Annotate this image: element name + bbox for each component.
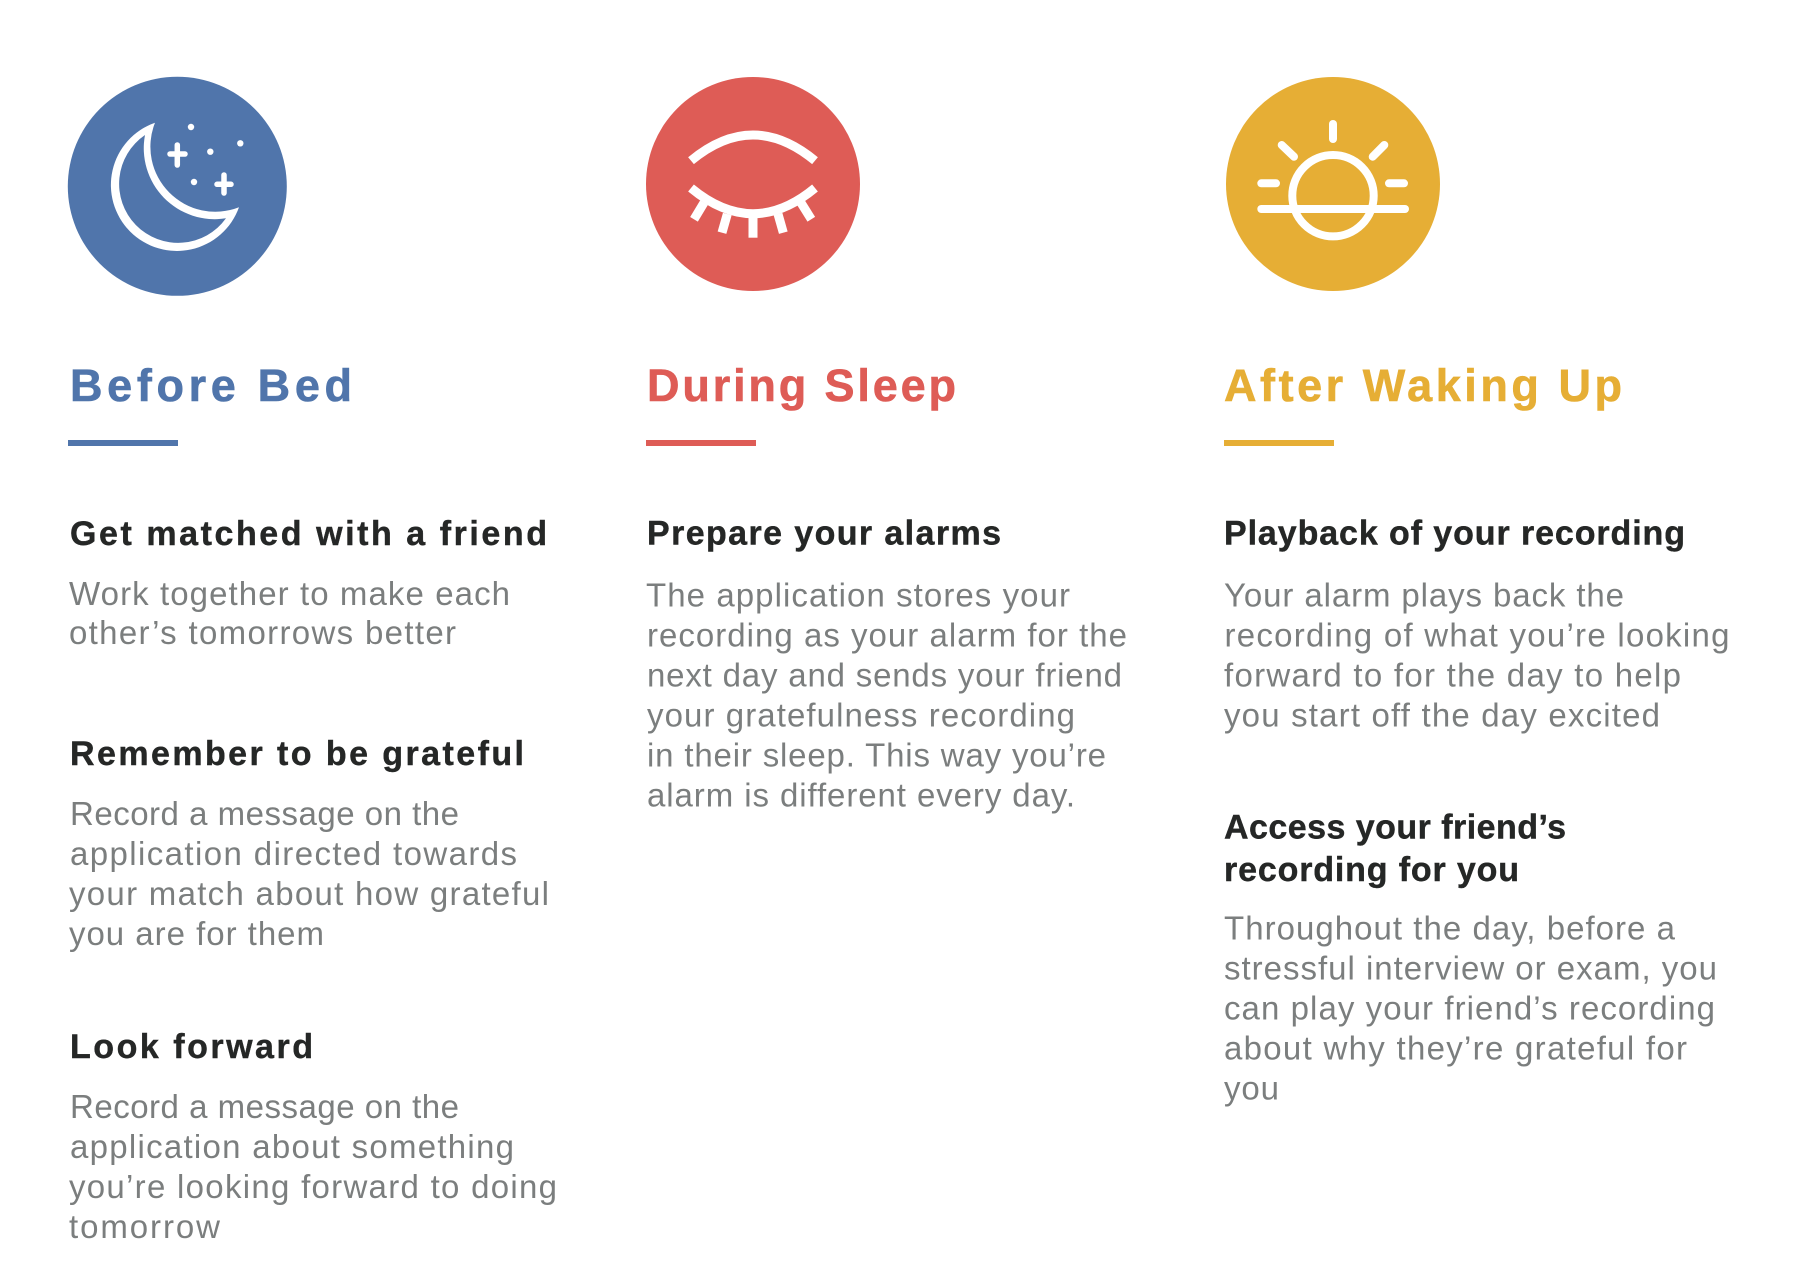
item: prepare your alarms: next day and sends your friend <box>647 657 1122 694</box>
item: look forward <box>69 1028 557 1245</box>
item: get matched with a friend: other’s tomorrows better <box>69 614 456 651</box>
panel: before bed <box>68 77 557 1245</box>
icon: crescent moon and stars <box>68 77 287 296</box>
item: access your friend's recording for you: recording for you <box>1224 851 1519 889</box>
item: prepare your alarms: recording as your alarm for the <box>647 617 1127 654</box>
item: prepare your alarms <box>646 514 1127 814</box>
item: playback of your recording <box>1224 514 1730 734</box>
icon: sun on the horizon <box>1226 77 1440 291</box>
item: look forward: application about something <box>70 1128 514 1165</box>
item: look forward: Look forward <box>70 1028 313 1066</box>
panel: after waking up <box>1224 77 1730 1106</box>
item: prepare your alarms: in their sleep. This way you’re <box>647 737 1106 774</box>
item: playback of your recording: you start off the day excited <box>1224 697 1660 734</box>
heading: during sleep: During Sleep <box>647 360 956 411</box>
item: get matched with a friend: Get matched with a friend <box>70 515 547 553</box>
item: remember to be grateful: you are for them <box>69 915 324 952</box>
item: remember to be grateful: Remember to be grateful <box>70 735 524 773</box>
item: remember to be grateful: application directed towards <box>70 835 517 872</box>
item: access your friend's recording for you <box>1224 809 1717 1106</box>
item: prepare your alarms: your gratefulness recording <box>647 697 1075 734</box>
item: playback of your recording: Your alarm plays back the <box>1224 577 1624 614</box>
item: prepare your alarms: alarm is different every day. <box>647 777 1075 814</box>
item: look forward: you’re looking forward to doing <box>69 1168 557 1205</box>
item: playback of your recording: Playback of your recording <box>1224 514 1685 552</box>
item: access your friend's recording for you: can play your friend’s recording <box>1224 989 1715 1026</box>
item: prepare your alarms: Prepare your alarms <box>647 514 1001 552</box>
item: playback of your recording: recording of what you’re looking <box>1224 617 1730 654</box>
item: look forward: Record a message on the <box>70 1088 459 1125</box>
item: remember to be grateful: your match about how grateful <box>69 875 549 912</box>
item: access your friend's recording for you: Throughout the day, before a <box>1224 909 1676 946</box>
item: remember to be grateful <box>69 735 549 952</box>
heading: before bed: Before Bed <box>70 360 352 411</box>
item: get matched with a friend <box>69 515 547 651</box>
item: access your friend's recording for you: stressful interview or exam, you <box>1224 949 1717 986</box>
item: playback of your recording: forward to for the day to help <box>1224 657 1681 694</box>
item: access your friend's recording for you: Access your friend’s <box>1224 809 1566 847</box>
heading: after waking up: After Waking Up <box>1224 360 1622 411</box>
item: look forward: tomorrow <box>69 1208 220 1245</box>
panel: during sleep <box>646 77 1127 814</box>
item: access your friend's recording for you: you <box>1224 1069 1279 1106</box>
heading underline <box>646 440 756 446</box>
item: remember to be grateful: Record a message on the <box>70 795 459 832</box>
heading underline <box>1224 440 1334 446</box>
item: access your friend's recording for you: about why they’re grateful for <box>1224 1029 1687 1066</box>
item: get matched with a friend: Work together to make each <box>69 575 510 612</box>
item: prepare your alarms: The application stores your <box>646 577 1070 614</box>
icon: closed eye with lashes <box>646 77 860 291</box>
heading underline <box>68 440 178 446</box>
